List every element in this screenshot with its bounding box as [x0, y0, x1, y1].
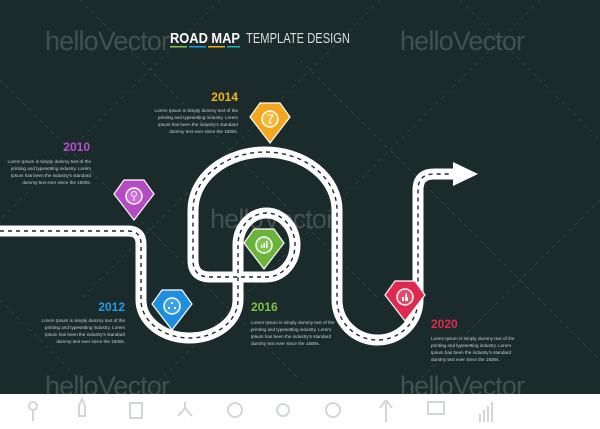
bottom icon strip [0, 394, 600, 429]
text 2012: 2012 [98, 300, 125, 314]
text 2014: Ipsum has been the industry's standard [158, 122, 238, 127]
text 2012: dummy text ever since the 1500s. [56, 339, 125, 344]
text 2016: 2016 [251, 300, 278, 314]
title: ROAD MAP [170, 30, 240, 47]
text 2020: Lorem Ipsum is simply dummy text of the [431, 336, 515, 341]
text 2016: printing and typesetting industry. Lorem [251, 327, 331, 332]
pin 2010 [114, 180, 154, 220]
text 2010: Lorem Ipsum is simply dummy text of the [8, 159, 91, 164]
pin 2012 [152, 290, 192, 330]
text 2010: 2010 [63, 140, 90, 154]
text 2014 [155, 90, 238, 134]
text 2020: 2020 [431, 317, 458, 331]
text 2020: printing and typesetting industry. Lorem [431, 343, 511, 348]
text 2016: Ipsum has been the industry's standard [251, 334, 331, 339]
text 2010 [8, 140, 91, 185]
pin 2014 [250, 103, 290, 143]
text 2014: 2014 [211, 90, 238, 104]
text 2010: dummy text ever since the 1500s. [22, 180, 91, 185]
watermarks: helloVector [210, 204, 335, 234]
arrow head [453, 162, 478, 186]
watermarks [45, 26, 525, 401]
text 2014: printing and typesetting industry. Lorem [158, 115, 238, 120]
text 2020: dummy text ever since the 1500s. [431, 357, 500, 362]
road [0, 152, 478, 340]
text 2020: Ipsum has been the industry's standard [431, 350, 511, 355]
watermarks: helloVector [400, 371, 525, 401]
pin 2020 [385, 281, 425, 321]
text 2012: printing and typesetting industry. Lorem [45, 325, 125, 330]
text 2012: Lorem Ipsum is simply dummy text of the [42, 318, 125, 323]
text 2012 [42, 300, 125, 344]
text 2012: Ipsum has been the industry's standard [45, 332, 125, 337]
text 2016 [251, 300, 335, 346]
watermarks: helloVector [45, 371, 170, 401]
pin 2016 [244, 229, 284, 269]
text 2010: Ipsum has been the industry's standard [11, 173, 91, 178]
text 2016: Lorem Ipsum is simply dummy text of the [251, 320, 335, 325]
text 2020 [431, 317, 515, 362]
text 2014: dummy text ever since the 1500s. [169, 129, 238, 134]
title [170, 30, 350, 48]
watermarks: helloVector [400, 26, 525, 56]
text 2016: dummy text ever since the 1500s. [251, 341, 320, 346]
text 2010: printing and typesetting industry. Lorem [11, 166, 91, 171]
text 2014: Lorem Ipsum is simply dummy text of the [155, 108, 238, 113]
watermarks: helloVector [45, 26, 170, 56]
title: TEMPLATE DESIGN [246, 30, 350, 47]
